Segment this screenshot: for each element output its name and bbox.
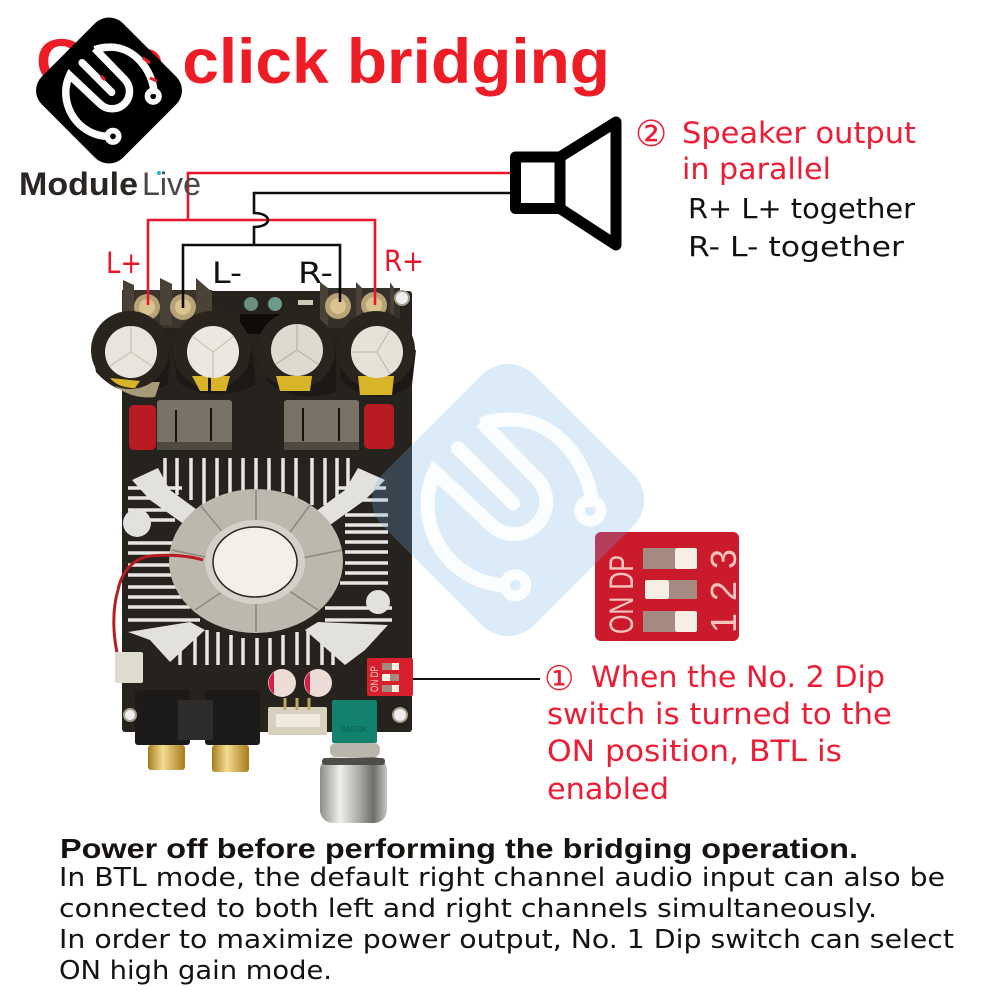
icon: speaker xyxy=(516,122,616,245)
icon: large DIP switch: ON DP xyxy=(603,555,641,634)
note: together lines: R+ L+ together xyxy=(688,192,915,225)
icon: small DIP switch on board xyxy=(367,658,413,696)
callout: DIP switch instruction: When the No. 2 Dip xyxy=(591,660,885,694)
note body: In order to maximize power output, No. 1 Dip switch can select xyxy=(59,925,954,955)
logo wordmark: Module xyxy=(19,166,138,202)
fan wire xyxy=(114,555,203,667)
fan connector xyxy=(115,652,143,683)
note body: ON high gain mode. xyxy=(59,956,332,986)
capacitors xyxy=(91,311,416,397)
panel: amplifier board xyxy=(91,278,416,823)
label: R+: R+ xyxy=(384,244,424,278)
red film capacitors xyxy=(129,404,394,450)
wiring: red positive xyxy=(148,173,512,305)
icon: large DIP switch: 2 xyxy=(703,581,744,601)
heatsink corner wedges xyxy=(123,468,390,665)
icon: small DIP switch on board: ON DP xyxy=(369,666,381,692)
inductors xyxy=(157,400,359,450)
note body: In BTL mode, the default right channel audio input can also be xyxy=(59,863,945,893)
heading: speaker output in parallel: Speaker output xyxy=(682,116,916,150)
small electrolytic capacitors xyxy=(268,669,332,697)
heading: speaker output in parallel xyxy=(635,114,916,186)
icon: large DIP switch xyxy=(595,532,744,641)
watermark xyxy=(357,349,659,651)
note: together lines xyxy=(688,192,915,263)
heading: speaker output in parallel: ② xyxy=(635,114,667,155)
note: together lines: R- L- together xyxy=(688,230,905,263)
callout: DIP switch instruction xyxy=(544,659,892,806)
wiring: black negative xyxy=(183,193,512,308)
logo mark xyxy=(28,9,190,172)
note heading: Power off before performing the bridging operation. xyxy=(60,833,858,864)
board PCB xyxy=(122,291,412,732)
logo red show-through xyxy=(101,58,157,81)
icon: large DIP switch: 1 xyxy=(703,613,744,633)
callout: speaker output xyxy=(635,114,916,263)
potentiometer: BM50K xyxy=(341,725,368,734)
logo wordmark: Live xyxy=(142,166,201,202)
label: L-: L- xyxy=(212,256,242,290)
callout: DIP switch instruction: ON position, BTL is xyxy=(547,734,842,768)
terminal blocks xyxy=(122,278,409,334)
label: R-: R- xyxy=(298,256,333,290)
icon: large DIP switch: 3 xyxy=(703,549,744,569)
callout: DIP switch instruction: ① xyxy=(544,659,574,699)
title: One click bridging xyxy=(36,27,610,97)
leader line to DIP switch xyxy=(413,678,540,680)
volume knob xyxy=(320,743,387,823)
callout: DIP switch instruction: enabled xyxy=(547,772,669,806)
potentiometer xyxy=(332,700,377,743)
note body: connected to both left and right channels simultaneously. xyxy=(59,894,877,924)
heading: speaker output in parallel: in parallel xyxy=(682,152,831,186)
input jacks xyxy=(135,690,260,772)
power connector xyxy=(268,698,327,735)
note body xyxy=(59,863,954,986)
callout: DIP switch instruction: switch is turned to the xyxy=(547,697,892,731)
label: L+: L+ xyxy=(106,246,142,280)
note: bridging operation text xyxy=(59,833,954,986)
heatsink fins xyxy=(128,458,392,665)
cooling fan xyxy=(169,489,343,633)
logo wordmark xyxy=(19,166,201,202)
logo: ModuleLive xyxy=(19,9,201,202)
mounting holes xyxy=(124,708,407,722)
